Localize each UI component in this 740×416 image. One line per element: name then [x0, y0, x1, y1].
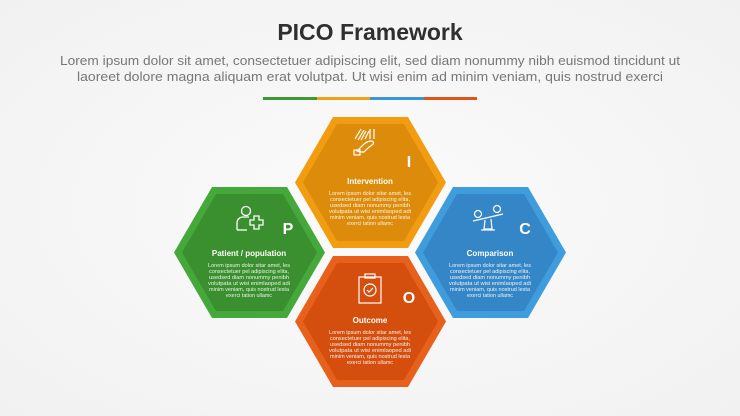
icon: hand with dominoes	[354, 129, 374, 155]
body text: usedsed diam nonummy penibh	[209, 275, 289, 281]
body text: consectetuer pel adipiscing elita,	[330, 197, 410, 203]
panel: outcome (O)	[295, 256, 446, 387]
body text: minim veniam, quis nostrud lesta	[209, 287, 290, 293]
letter I: I	[407, 154, 411, 171]
letter P: P	[283, 221, 294, 238]
body text	[449, 263, 531, 299]
body text: exerci tation ullamc	[467, 293, 513, 299]
body text: minim veniam, quis nostrud lesta	[330, 354, 411, 360]
title: PICO Framework	[277, 19, 463, 45]
body text	[329, 330, 411, 366]
body text: usedsed diam nonummy penibh	[450, 275, 530, 281]
body text: volutpata ut wisi enimlaoped adi	[329, 348, 411, 354]
body text: usedsed diam nonummy penibh	[330, 203, 410, 209]
body text: exerci tation ullamc	[347, 221, 393, 227]
subtitle	[60, 54, 681, 84]
icon: patient plus	[237, 206, 263, 230]
body text: volutpata ut wisi enimlaoped adi	[329, 209, 411, 215]
subtitle: Lorem ipsum dolor sit amet, consectetuer adipiscing elit, sed diam nonummy nibh euismod tincidunt ut	[60, 54, 681, 68]
panel: intervention (I)	[295, 117, 446, 248]
body text: Lorem ipsum dolor sitar amet, les	[449, 263, 531, 269]
panel: comparison (C)	[415, 187, 566, 318]
body text: exerci tation ullamc	[226, 293, 272, 299]
color divider bar	[263, 97, 477, 100]
body text: consectetuer pel adipiscing elita,	[450, 269, 530, 275]
body text: usedsed diam nonummy penibh	[330, 342, 410, 348]
icon: clipboard check	[359, 274, 381, 303]
body text: Lorem ipsum dolor sitar amet, les	[208, 263, 290, 269]
icon: balance scale	[473, 206, 503, 230]
body text: minim veniam, quis nostrud lesta	[330, 215, 411, 221]
letter C: C	[519, 221, 531, 238]
body text: volutpata ut wisi enimlaoped adi	[449, 281, 531, 287]
body text: Lorem ipsum dolor sitar amet, les	[329, 330, 411, 336]
body text: exerci tation ullamc	[347, 360, 393, 366]
body text: minim veniam, quis nostrud lesta	[450, 287, 531, 293]
heading: Comparison	[467, 249, 513, 258]
body text: Lorem ipsum dolor sitar amet, les	[329, 191, 411, 197]
panel: patient / population (P)	[174, 187, 325, 318]
letter O: O	[403, 290, 415, 307]
subtitle: laoreet dolore magna aliquam erat volutpat. Ut wisi enim ad minim veniam, quis nostrud exerci	[77, 70, 663, 84]
body text	[208, 263, 290, 299]
body text: consectetuer pel adipiscing elita,	[209, 269, 289, 275]
body text: volutpata ut wisi enimlaoped adi	[208, 281, 290, 287]
body text	[329, 191, 411, 227]
heading: Outcome	[353, 316, 388, 325]
body text: consectetuer pel adipiscing elita,	[330, 336, 410, 342]
heading: Patient / population	[212, 249, 286, 258]
heading: Intervention	[347, 177, 393, 186]
